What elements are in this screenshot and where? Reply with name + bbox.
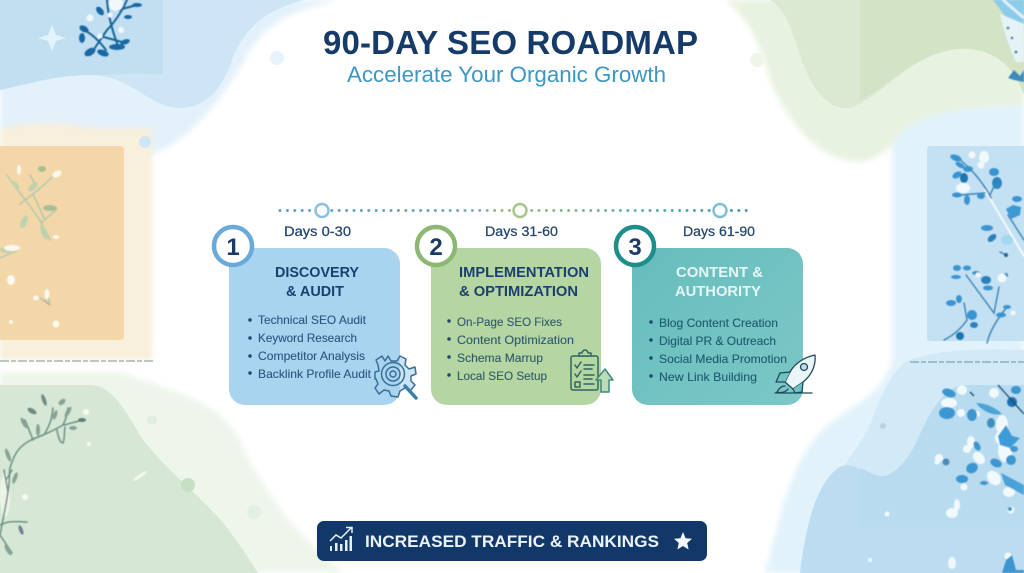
label: days 61-90: Days 61-90 xyxy=(683,224,755,239)
list: content tasks: Blog Content Creation xyxy=(659,316,778,330)
list: discovery tasks xyxy=(248,313,372,381)
plant: top right blue xyxy=(993,0,1024,82)
heading: content and authority: CONTENT & xyxy=(676,265,764,281)
heading: implementation and optimization: IMPLEMENTATION xyxy=(459,265,589,281)
list: implementation tasks: On-Page SEO Fixes xyxy=(457,315,562,329)
list: discovery tasks: Backlink Profile Audit xyxy=(258,367,372,381)
list: implementation tasks: Content Optimization xyxy=(457,333,574,347)
badge: step 1 xyxy=(214,227,252,265)
badge: step 1: 1 xyxy=(226,234,240,261)
panel: content and authority xyxy=(632,248,803,405)
plant: lower right blue xyxy=(868,385,1024,573)
timeline marker 2 xyxy=(514,204,526,217)
list: implementation tasks: Local SEO Setup xyxy=(457,369,547,383)
plant: bottom left green xyxy=(0,394,147,556)
title: 90-DAY SEO ROADMAP xyxy=(323,24,698,61)
plant: right panel blue xyxy=(944,151,1024,343)
icon: growth chart xyxy=(330,528,352,551)
banner: increased traffic and rankings xyxy=(317,521,707,561)
timeline xyxy=(280,204,748,217)
icon: clipboard with arrow xyxy=(571,350,613,392)
badge: step 3 xyxy=(616,227,654,265)
badge: step 3: 3 xyxy=(628,234,642,261)
heading: implementation and optimization: & OPTIMIZATION xyxy=(459,284,578,300)
plant: top left blue xyxy=(78,0,142,58)
heading: discovery and audit: & AUDIT xyxy=(286,284,344,300)
icon: gear with magnifier xyxy=(375,356,416,398)
badge: step 2: 2 xyxy=(429,234,443,261)
heading: discovery and audit xyxy=(275,265,359,300)
heading: implementation and optimization xyxy=(459,265,589,300)
list: implementation tasks xyxy=(447,315,574,383)
list: content tasks: Digital PR & Outreach xyxy=(659,334,776,348)
list: content tasks: Social Media Promotion xyxy=(659,352,787,366)
list: content tasks xyxy=(649,316,787,384)
list: discovery tasks: Technical SEO Audit xyxy=(258,313,367,327)
dashed divider right xyxy=(910,361,1024,363)
dashed divider left xyxy=(0,360,154,362)
timeline marker 3 xyxy=(714,204,726,217)
plant: peach panel xyxy=(0,165,63,328)
list: discovery tasks: Competitor Analysis xyxy=(258,349,365,363)
subtitle: Accelerate Your Organic Growth xyxy=(347,62,666,87)
panel: implementation and optimization xyxy=(431,248,601,405)
label: days 31-60: Days 31-60 xyxy=(485,224,558,239)
banner text: INCREASED TRAFFIC & RANKINGS xyxy=(365,532,659,551)
list: content tasks: New Link Building xyxy=(659,370,757,384)
panel: discovery and audit xyxy=(229,248,400,405)
badge: step 2 xyxy=(417,227,455,265)
heading: content and authority: AUTHORITY xyxy=(675,284,761,300)
list: implementation tasks: Schema Marrup xyxy=(457,351,543,365)
decorative star xyxy=(38,25,66,51)
timeline marker 1 xyxy=(316,204,328,217)
heading: content and authority xyxy=(675,265,764,300)
icon: rocket xyxy=(775,355,815,393)
icon: star xyxy=(674,532,692,550)
heading: discovery and audit: DISCOVERY xyxy=(275,265,359,281)
label: days 0-30: Days 0-30 xyxy=(284,224,351,239)
list: discovery tasks: Keyword Research xyxy=(258,331,357,345)
